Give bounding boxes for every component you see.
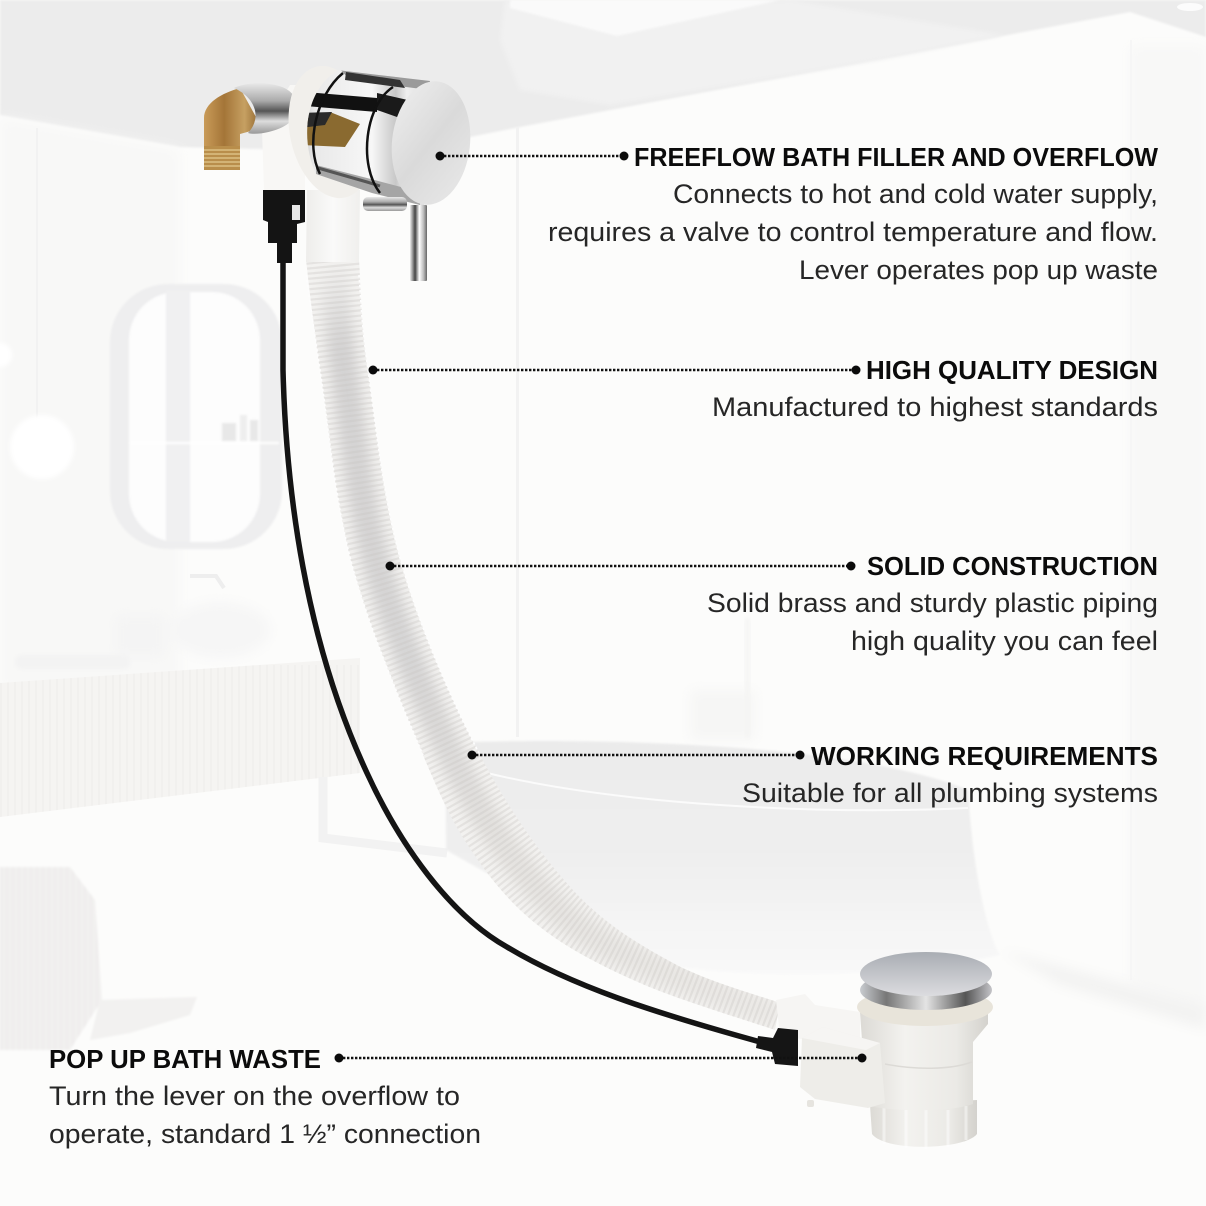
corrugated white hose [306, 262, 778, 1030]
chrome cap [860, 952, 992, 996]
black connector [756, 1028, 798, 1066]
callout: working requirements: WORKING REQUIREMENTS [811, 741, 1158, 771]
icon: brass elbow [204, 88, 262, 170]
background bathtub [446, 741, 1000, 974]
background cabinet leg [323, 777, 447, 853]
callout: pop up bath waste: operate, standard 1 ½” connection [49, 1119, 481, 1149]
white coupling [776, 994, 860, 1050]
waste body [860, 1012, 988, 1110]
callout: solid construction [386, 551, 1158, 656]
black cable connector [263, 190, 305, 263]
valve end cap [386, 77, 476, 209]
callout: high quality design [368, 355, 1158, 422]
hose top collar [306, 190, 360, 262]
chrome valve body [307, 70, 430, 205]
white tee fitting [262, 85, 305, 190]
callout: solid construction: high quality you can feel [851, 626, 1158, 656]
filler and overflow assembly [204, 58, 476, 281]
callout: freeflow bath filler: Lever operates pop up waste [799, 255, 1158, 285]
lower nut [870, 1100, 977, 1149]
background vanity cabinet [0, 658, 360, 817]
background rug [0, 867, 197, 1050]
callout: solid construction: SOLID CONSTRUCTION [867, 551, 1158, 581]
callout: pop up bath waste: Turn the lever on the overflow to [49, 1081, 460, 1111]
flange [857, 988, 993, 1026]
callout: pop up bath waste [49, 1044, 866, 1149]
ceiling [0, 0, 1206, 150]
callout: freeflow bath filler: FREEFLOW BATH FILLER AND OVERFLOW [634, 142, 1158, 172]
callout: pop up bath waste: POP UP BATH WASTE [49, 1044, 321, 1074]
white side box [800, 1027, 885, 1108]
chrome lever [410, 205, 427, 281]
callout: freeflow bath filler [436, 142, 1158, 285]
chrome ring [860, 970, 992, 1010]
background mirror [110, 284, 282, 549]
white flange disc [277, 58, 385, 206]
callout: solid construction: Solid brass and sturdy plastic piping [707, 588, 1158, 618]
callout: working requirements [468, 741, 1158, 808]
hose serrated edges [359, 275, 480, 755]
small chrome collar [363, 197, 407, 211]
callout: working requirements: Suitable for all plumbing systems [742, 778, 1158, 808]
callout: freeflow bath filler: Connects to hot and cold water supply, [673, 179, 1158, 209]
callout: high quality design: HIGH QUALITY DESIGN [866, 355, 1158, 385]
callout: freeflow bath filler: requires a valve to control temperature and flow. [548, 217, 1158, 247]
pop up waste assembly [756, 952, 993, 1149]
cable: black pop-up control cable [283, 240, 775, 1046]
callout: high quality design: Manufactured to highest standards [712, 392, 1158, 422]
icon: knurled nut [234, 83, 293, 134]
